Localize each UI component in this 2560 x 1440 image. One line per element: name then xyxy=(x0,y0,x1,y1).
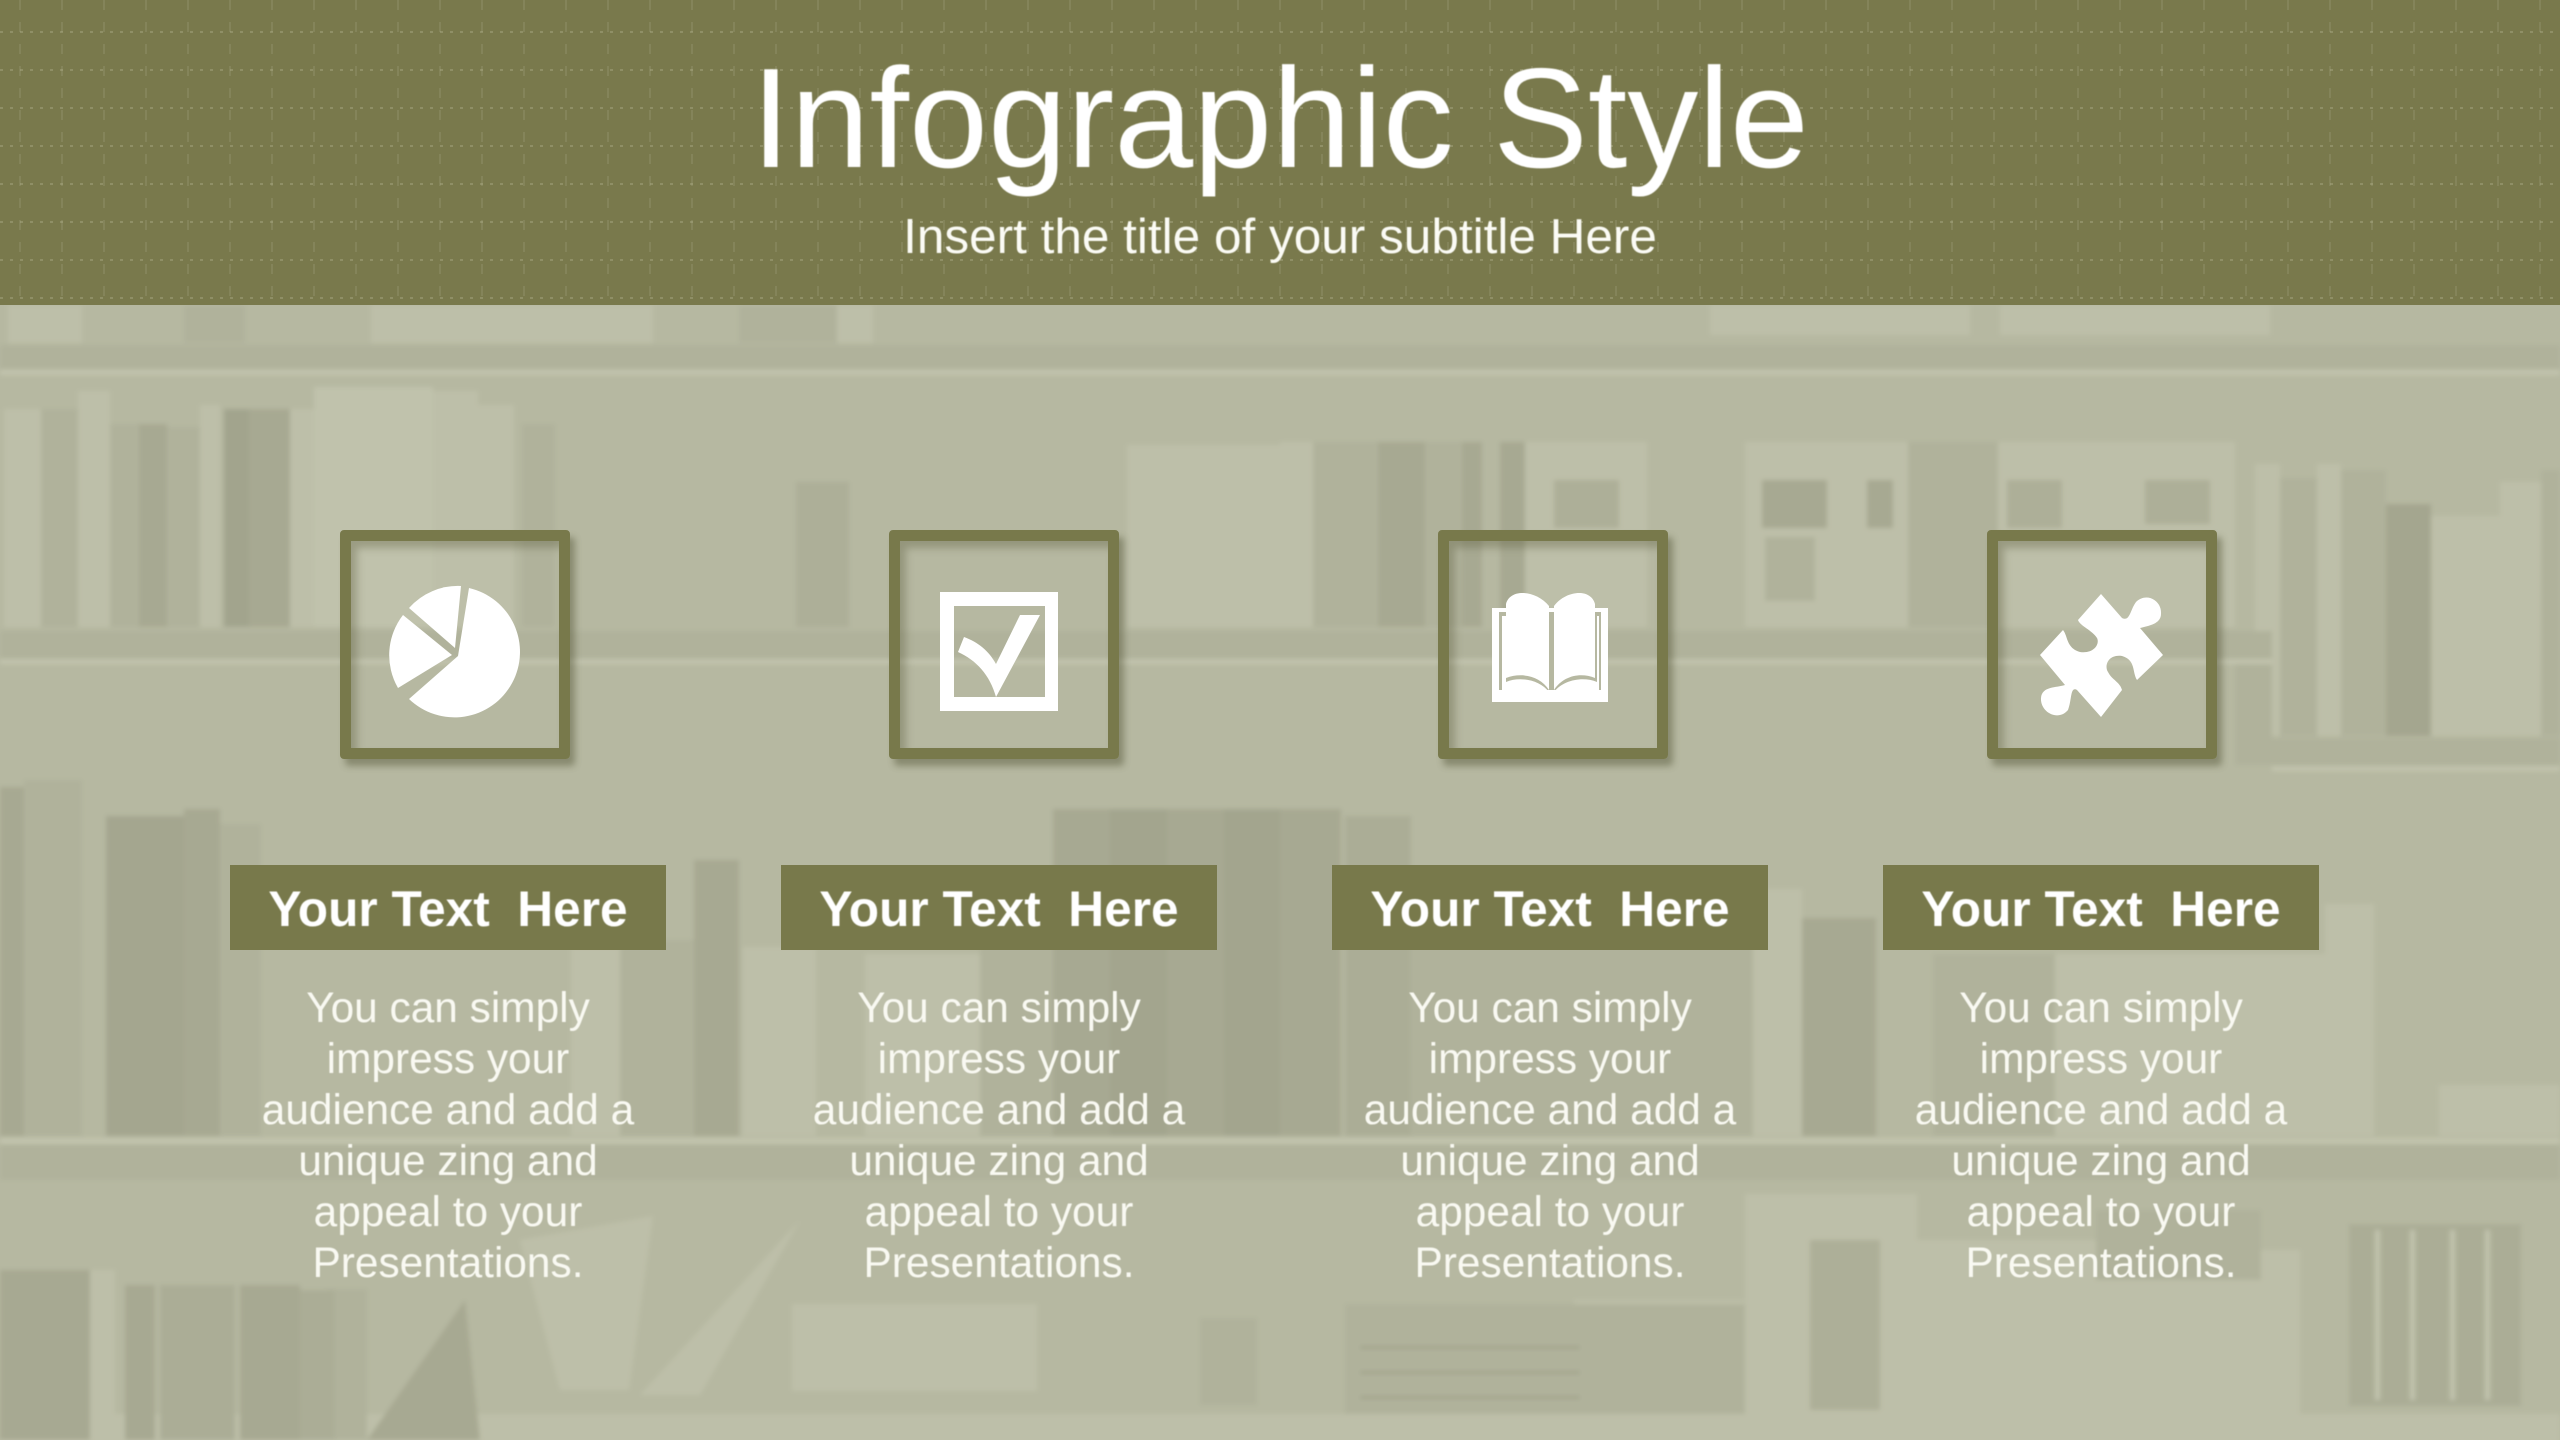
text block: appeal to your xyxy=(1967,1188,2235,1235)
icon frame xyxy=(1987,530,2217,759)
text block: unique zing and xyxy=(849,1137,1149,1184)
icon: check box xyxy=(940,592,1058,711)
header band with title xyxy=(0,0,2560,305)
title: Infographic Style xyxy=(751,39,1809,198)
text block: impress your xyxy=(1429,1035,1671,1082)
text block: You can simply xyxy=(1408,984,1692,1031)
icon frame xyxy=(1438,530,1668,759)
text block: Presentations. xyxy=(864,1239,1134,1286)
text block: impress your xyxy=(878,1035,1120,1082)
text block: Presentations. xyxy=(312,1239,584,1286)
column 4 xyxy=(1883,530,2319,1286)
text block: impress your xyxy=(1980,1035,2222,1082)
text block: impress your xyxy=(327,1035,569,1082)
text block: You can simply xyxy=(306,984,590,1031)
text block: Presentations. xyxy=(1966,1239,2236,1286)
text block xyxy=(262,984,635,1286)
text block xyxy=(1915,984,2288,1286)
icon frame xyxy=(889,530,1119,759)
text block: You can simply xyxy=(1959,984,2243,1031)
text block: You can simply xyxy=(857,984,1141,1031)
heading xyxy=(1332,865,1768,950)
text block: appeal to your xyxy=(1416,1188,1684,1235)
text block: unique zing and xyxy=(298,1137,598,1184)
text block: audience and add a xyxy=(1915,1086,2287,1133)
icon: open book xyxy=(1492,593,1608,702)
text block xyxy=(813,984,1186,1286)
column 2 xyxy=(781,530,1217,1286)
text block: appeal to your xyxy=(314,1188,582,1235)
text block: Presentations. xyxy=(1414,1239,1686,1286)
icon frame xyxy=(340,530,570,759)
heading: Your Text Here xyxy=(268,881,628,937)
text block: unique zing and xyxy=(1400,1137,1700,1184)
subtitle: Insert the title of your subtitle Here xyxy=(903,209,1657,264)
column 3 xyxy=(1332,530,1768,1286)
column 1 xyxy=(230,530,666,1286)
text block: appeal to your xyxy=(865,1188,1133,1235)
text block: audience and add a xyxy=(262,1086,634,1133)
text block: audience and add a xyxy=(1364,1086,1736,1133)
heading: Your Text Here xyxy=(819,881,1179,937)
text block: audience and add a xyxy=(813,1086,1185,1133)
text block: unique zing and xyxy=(1951,1137,2251,1184)
icon: pie chart xyxy=(389,586,520,718)
icon: puzzle piece xyxy=(2040,594,2163,717)
heading xyxy=(1883,865,2319,950)
heading: Your Text Here xyxy=(1921,881,2281,937)
heading: Your Text Here xyxy=(1370,881,1730,937)
text block xyxy=(1364,984,1737,1286)
heading xyxy=(781,865,1217,950)
heading xyxy=(230,865,666,950)
